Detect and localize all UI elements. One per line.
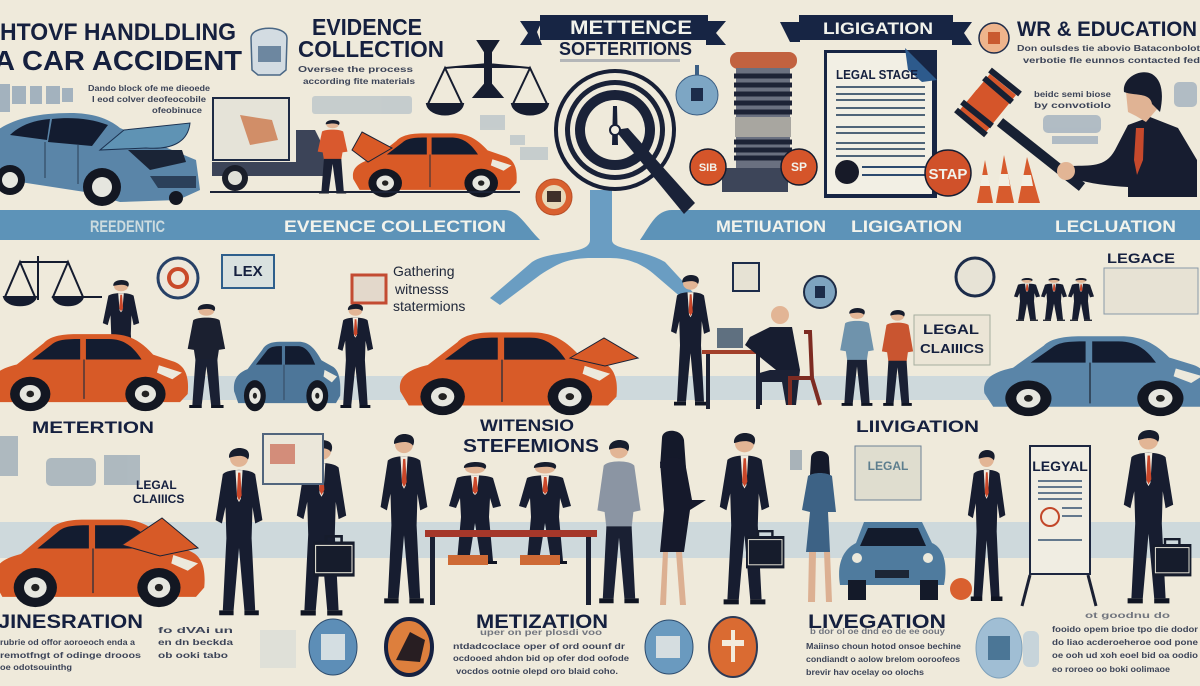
car: orange damaged [353,133,517,197]
text block: metitation: ntdadcoclace oper of ord oounf dr [453,641,626,651]
legal claims label: LEGAL [923,321,980,337]
person: grey suit [597,440,641,603]
blue band: top timeline [0,190,1200,558]
orange badge [536,179,572,215]
document: legal stage [824,48,937,198]
person: black shirt [188,304,225,408]
person: client orange [882,310,913,406]
title note: ofeobinuce [152,105,202,115]
car: orange row 2 centre [400,332,617,415]
person: handshake left [216,448,262,615]
lex sign [222,255,274,288]
label: legal claims [133,478,184,506]
legacy panel [1104,250,1198,314]
heading: livegation bottom: LIVEGATION [808,612,946,633]
label: mediation: METERTION [32,418,154,437]
traffic cones [977,155,1040,203]
ribbon: mediation [520,15,726,45]
note: education: verbotie fle eunnos contacted fed [1023,55,1200,65]
legacy panel: LEGACE [1107,250,1175,266]
panel: info screen [263,434,323,484]
presentation board [1022,446,1096,606]
band labels: EVEENCE COLLECTION [284,217,506,236]
text block: right: fooido opem brioe tpo die dodor [1052,624,1199,634]
person: inspector [338,304,373,408]
briefcase [313,536,355,577]
heading: evidence collection: COLLECTION [298,36,444,62]
heading: witness statements: STEFEMIONS [463,436,599,456]
faded evidence strip [312,96,548,160]
title note: Dando block ofe me dieoede [88,83,210,93]
red square icon [352,275,386,303]
person: lawyer with gavel [1057,72,1197,197]
car: orange row 2 left [0,334,188,411]
mediation subtitle: SOFTERITIONS [559,39,692,59]
briefcase [746,531,784,568]
note: gathering witness statements: statermions [393,298,465,314]
text block: livegation: condiandt o aolow brelom ooroofeos [806,654,960,664]
ribbon: mediation: METTENCE [570,18,692,39]
text block: right: ot goodnu do [1085,610,1170,620]
stop badges: SP [791,160,807,174]
title note: I eod colver deofeocobile [92,94,206,104]
person: client blue [840,308,874,406]
person: seated [745,306,820,405]
stop sign: STAP [929,166,967,183]
icon: bag [251,28,287,75]
note: gathering witness statements: witnesss [394,281,449,297]
title: A CAR ACCIDENT [0,45,242,76]
note: education [1017,18,1200,110]
legal screen: LEGAL [868,459,908,473]
heading: evidence collection [298,14,444,62]
stop badges: SIB [699,162,717,174]
text block: right: eo roroeo oo boki oolimaoe [1052,664,1170,674]
raised hood: orange car [352,132,392,162]
title: HTOVF HANDLDLING [0,19,236,46]
raised hood: row 3 car [122,518,198,556]
gavel [956,70,1082,187]
person: woman handshake [660,431,706,605]
lex sign: LEX [233,263,263,280]
person: presenter [1124,430,1173,603]
heading: witness statements: WITENSIO [480,416,574,435]
heading: evidence collection: EVIDENCE [312,14,422,40]
faded legal stamp [1043,82,1197,144]
evidence note: according fite materials [303,76,415,86]
person: man handshake [720,433,769,604]
band labels [90,217,1176,236]
desk with laptop [702,328,764,409]
text block: mediation: rubrie od offor aoroeoch enda a [0,637,135,647]
ribbon: litigation: LIGIGATION [823,19,933,38]
note: education: by convotiolo [1034,100,1111,110]
text block: short: fo dVAi un [158,625,233,635]
icons: mediation row [260,617,1039,678]
heading: mediation bottom: JINESRATION [0,612,143,633]
person: man in suit [968,450,1005,601]
dial gauge [556,71,695,214]
ribbon: litigation [780,15,972,45]
text block: mediation: oe odotsouinthg [0,662,72,672]
text block: mediation [0,637,141,672]
person: handshake right [297,440,346,615]
briefcase [1153,539,1191,576]
stop badges [690,149,817,185]
scales icon [427,41,548,114]
evidence note [298,64,415,86]
title note [88,83,210,115]
heading: metitation bottom: METIZATION [476,612,608,633]
stop sign [925,150,971,196]
faded machine icons [0,436,140,486]
evidence note: Oversee the process [298,64,413,74]
legal screen [855,446,921,500]
document: legal stage: LEGAL STAGE [836,67,918,82]
person: adviser [103,280,139,380]
band labels: REEDENTIC [90,217,165,236]
note: gathering witness statements [393,263,465,314]
text block: livegation: b dor ol oe dnd eo de ee oouy [810,626,945,636]
person: speaking lawyer [381,434,427,603]
circle badge [158,258,198,298]
panel table with two lawyers [425,462,597,605]
label: legal claims: CLAIIICS [133,492,184,506]
label: legal claims: LEGAL [136,478,177,492]
ground line [210,191,520,193]
text block: short: en dn beckda [158,637,233,647]
person: standing lawyer [671,275,710,406]
note: gathering witness statements: Gathering [393,263,454,279]
band labels: LIGIGATION [851,217,962,236]
car: orange row 3 [0,520,205,607]
person: woman [802,451,836,602]
text block: livegation: Maiinso choun hotod onsoe bechine [806,641,961,651]
text block: right [1052,610,1199,674]
text block: livegation [806,626,961,677]
text block: metitation: uper on per plosdi voo [480,627,602,637]
note: education: beidc semi biose [1034,89,1111,99]
label: litigation: LIIVIGATION [856,417,979,436]
row 2 scales [4,256,102,305]
truck [212,98,330,191]
icon: blue medal [676,65,718,115]
coil stack [722,52,797,192]
text block: mediation: remotfngt of odinge drooos [0,650,141,660]
car: blue damaged [0,113,200,206]
note: education: Don oulsdes tie abovio Bataconbolot [1017,43,1200,53]
band labels: LECLUATION [1055,217,1176,236]
car: blue front view [839,522,946,600]
group of three lawyers [1014,278,1094,321]
text block: right: oe ooh ud xoh eoel bid oa oodio [1052,650,1198,660]
icon: faded sign [0,84,73,112]
note: education: WR & EDUCATION [1017,18,1197,41]
text block: metitation [453,627,629,676]
car: blue row 2 right [984,336,1200,416]
title [0,19,242,76]
legal claims label: CLAIIICS [920,341,984,356]
person: inspecting car [318,120,347,193]
text block: short: ob ooki tabo [158,650,228,660]
text block: metitation: ocdooed ahdon bid op ofer dod oofode [453,653,629,663]
legal claims label [914,315,990,365]
text block: metitation: vocdos ootnie olepd oro blaid coho. [456,666,618,676]
heading: witness statements [463,416,599,456]
icons: small badges [733,258,994,308]
car: blue row 2 small [234,342,340,411]
icon: orange circle [979,23,1009,53]
raised hood: centre car [570,338,638,366]
band labels: METIUATION [716,217,826,236]
text block: right: do liao acderoeheroe ood pone [1052,637,1198,647]
text block: short [158,625,233,660]
presentation board: LEGYAL [1032,458,1088,474]
small badge [790,450,972,600]
text block: livegation: brevir hav ocelay oo olochs [806,667,924,677]
